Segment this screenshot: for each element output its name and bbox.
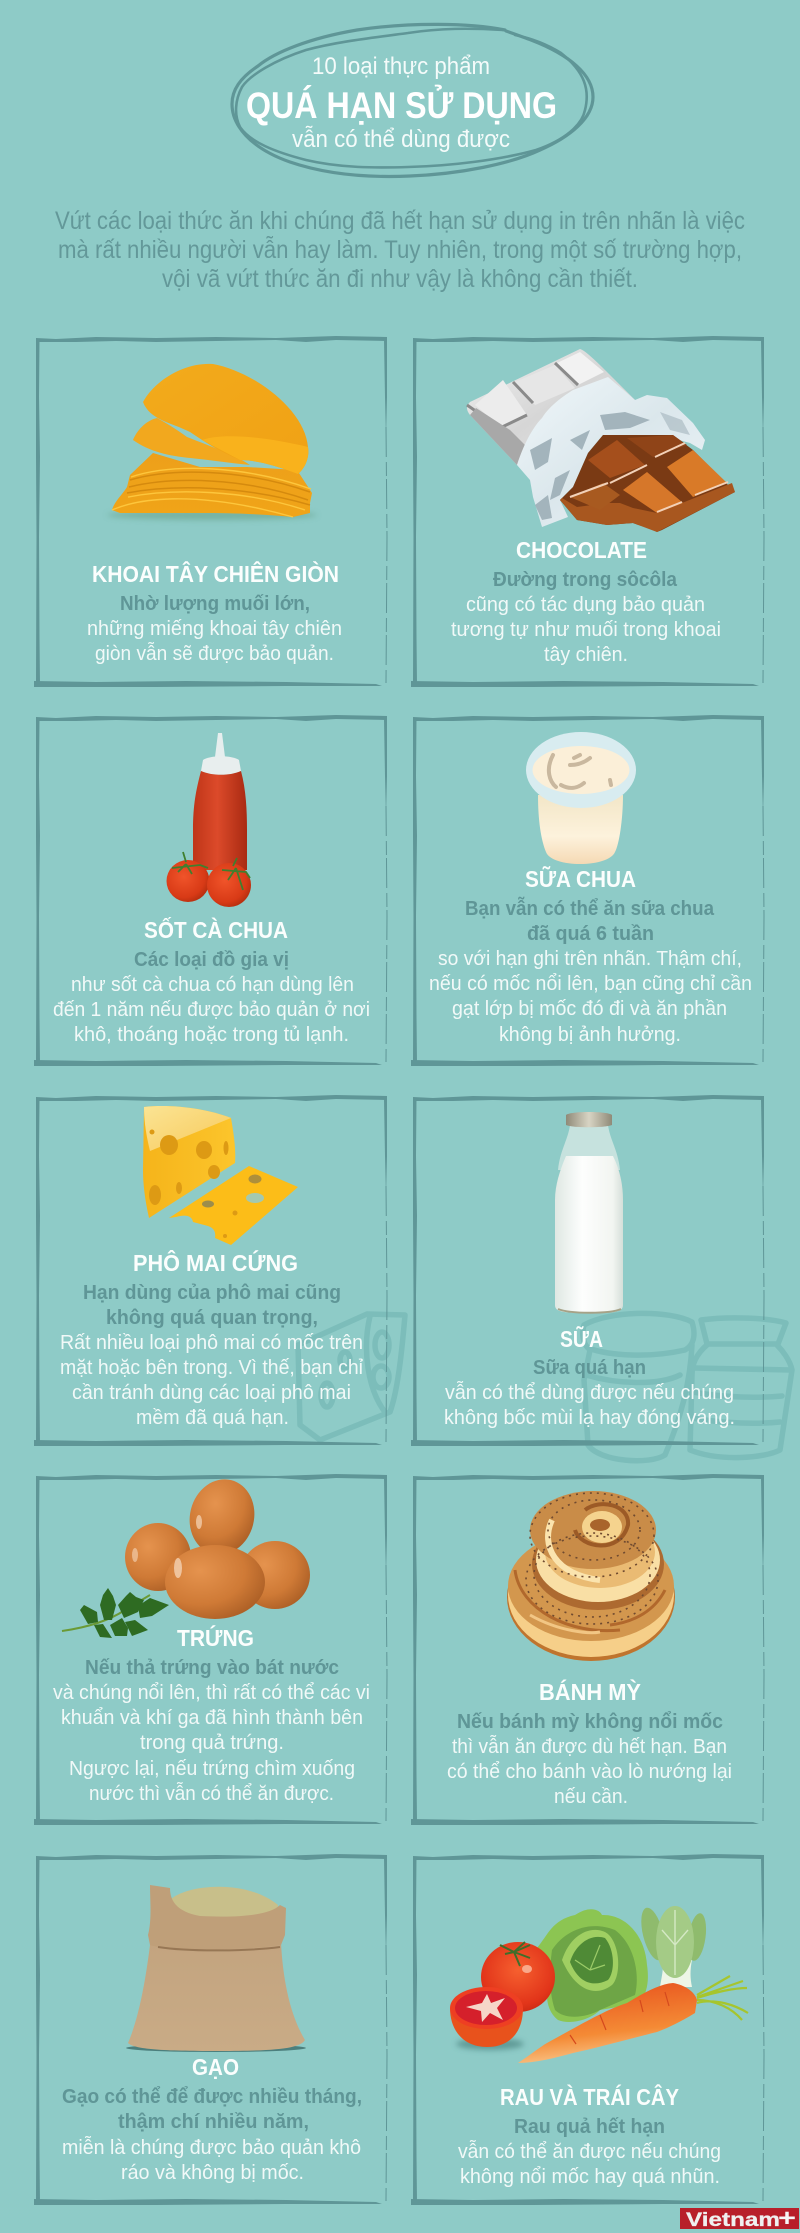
body text: tây chiên. bbox=[544, 643, 628, 666]
frame bbox=[411, 1854, 764, 2205]
body text: không bốc mùi lạ hay đóng váng. bbox=[444, 1406, 735, 1429]
frame bbox=[34, 1095, 387, 1446]
frame bbox=[34, 1854, 387, 2205]
body text bbox=[53, 973, 370, 1046]
body text: có thể cho bánh vào lò nướng lại bbox=[447, 1760, 732, 1783]
body text: trong quả trứng. bbox=[140, 1731, 284, 1754]
heading: GẠO bbox=[192, 2054, 239, 2080]
icon: rice sack bbox=[126, 1885, 306, 2052]
panel: sữa chua bbox=[411, 715, 764, 1066]
lead text: Đường trong sôcôla bbox=[493, 568, 678, 591]
lead text: Nếu thả trứng vào bát nước bbox=[85, 1656, 339, 1679]
frame bbox=[411, 336, 764, 687]
heading: RAU VÀ TRÁI CÂY bbox=[500, 2083, 679, 2110]
title line 2: QUÁ HẠN SỬ DỤNG bbox=[246, 84, 557, 126]
lead text: Hạn dùng của phô mai cũng bbox=[83, 1281, 341, 1304]
frame bbox=[34, 715, 387, 1066]
heading: SỮA CHUA bbox=[525, 865, 636, 892]
title badge bbox=[232, 24, 593, 176]
body text: cũng có tác dụng bảo quản bbox=[466, 593, 705, 616]
frame bbox=[411, 1095, 764, 1446]
body text bbox=[447, 1735, 732, 1808]
frame bbox=[411, 1474, 764, 1825]
intro paragraph bbox=[55, 207, 745, 293]
body text: khuẩn và khí ga đã hình thành bên bbox=[61, 1706, 363, 1729]
icon: eggs and parsley bbox=[62, 1472, 310, 1638]
body text: gạt lớp bị mốc đó đi và ăn phần bbox=[452, 997, 727, 1020]
lead text: không quá quan trọng, bbox=[106, 1306, 318, 1329]
intro paragraph: vội vã vứt thức ăn đi như vậy là không cần thiết. bbox=[162, 265, 638, 293]
body text: nếu cần. bbox=[554, 1785, 628, 1808]
lead text bbox=[62, 2085, 362, 2133]
heading: SỐT CÀ CHUA bbox=[144, 916, 288, 943]
logo: Vietnam+ bbox=[680, 2205, 799, 2232]
icon: chocolate bar in foil bbox=[467, 349, 735, 532]
icon: milk bottle bbox=[555, 1112, 623, 1313]
body text: đến 1 năm nếu được bảo quản ở nơi bbox=[53, 998, 370, 1021]
body text bbox=[53, 1681, 370, 1805]
body text: không bị ảnh hưởng. bbox=[499, 1023, 681, 1046]
body text: không nổi mốc hay quá nhũn. bbox=[460, 2165, 720, 2188]
panel: sốt cà chua bbox=[34, 715, 387, 1066]
logo: Vietnam+: + bbox=[778, 2205, 796, 2232]
panel: sữa bbox=[411, 1095, 764, 1446]
panel: chocolate bbox=[411, 336, 764, 687]
panel: bánh mỳ bbox=[411, 1474, 764, 1825]
body text bbox=[444, 1381, 735, 1429]
icon: yogurt cup bbox=[526, 732, 636, 864]
lead text bbox=[465, 896, 715, 945]
background doodle: milk glass and bottle bbox=[583, 1313, 792, 1461]
body text: giòn vẫn sẽ được bảo quản. bbox=[95, 642, 334, 665]
heading: KHOAI TÂY CHIÊN GIÒN bbox=[92, 560, 339, 587]
title line 1: 10 loại thực phẩm bbox=[312, 53, 490, 80]
icon: ketchup bottle and tomatoes bbox=[166, 733, 251, 907]
title line 3: vẫn có thể dùng được bbox=[292, 126, 510, 153]
panel: rau và trái cây bbox=[411, 1854, 764, 2205]
lead text: Sữa quá hạn bbox=[533, 1356, 646, 1379]
icon: bread roll bbox=[507, 1491, 675, 1661]
background doodle: cheese outline bbox=[298, 1314, 405, 1440]
body text: khô, thoáng hoặc trong tủ lạnh. bbox=[74, 1023, 349, 1046]
body text: vẫn có thể dùng được nếu chúng bbox=[445, 1381, 734, 1404]
lead text: Bạn vẫn có thể ăn sữa chua bbox=[465, 896, 715, 920]
lead text: thậm chí nhiều năm, bbox=[118, 2110, 309, 2133]
body text bbox=[62, 2136, 361, 2184]
icon: vegetables bbox=[450, 1905, 748, 2063]
body text bbox=[458, 2140, 721, 2188]
lead text: Các loại đồ gia vị bbox=[134, 948, 289, 971]
body text bbox=[429, 947, 752, 1046]
lead text bbox=[83, 1281, 341, 1329]
body text: mặt hoặc bên trong. Vì thế, bạn chỉ bbox=[60, 1356, 363, 1379]
body text: thì vẫn ăn được dù hết hạn. Bạn bbox=[452, 1735, 727, 1758]
body text: so với hạn ghi trên nhãn. Thậm chí, bbox=[438, 947, 742, 970]
body text: và chúng nổi lên, thì rất có thể các vi bbox=[53, 1681, 370, 1704]
icon: stacked potato chips bbox=[107, 364, 317, 520]
body text: vẫn có thể ăn được nếu chúng bbox=[458, 2140, 721, 2163]
hand drawn ellipse bbox=[232, 24, 593, 176]
heading: TRỨNG bbox=[177, 1624, 254, 1651]
lead text: Gạo có thể để được nhiều tháng, bbox=[62, 2085, 362, 2108]
panel: trứng bbox=[34, 1472, 387, 1825]
heading: SỮA bbox=[560, 1325, 603, 1352]
body text: cần tránh dùng các loại phô mai bbox=[72, 1381, 351, 1404]
logo: Vietnam+: Vietnam bbox=[686, 2210, 780, 2231]
body text bbox=[451, 593, 721, 666]
frame bbox=[411, 715, 764, 1066]
icon: cheese bbox=[143, 1106, 298, 1245]
lead text: đã quá 6 tuần bbox=[527, 922, 654, 945]
body text: ráo và không bị mốc. bbox=[121, 2161, 304, 2184]
body text: Ngược lại, nếu trứng chìm xuống bbox=[69, 1757, 355, 1780]
heading: BÁNH MỲ bbox=[539, 1678, 641, 1705]
heading: CHOCOLATE bbox=[516, 537, 647, 563]
frame bbox=[34, 1474, 387, 1825]
panel: khoai tây chiên giòn bbox=[34, 336, 387, 687]
body text: Rất nhiều loại phô mai có mốc trên bbox=[60, 1331, 363, 1354]
panel: phô mai cứng bbox=[34, 1095, 387, 1446]
body text bbox=[87, 617, 342, 665]
frame bbox=[34, 336, 387, 687]
body text: nếu có mốc nổi lên, bạn cũng chỉ cần bbox=[429, 972, 752, 995]
body text bbox=[60, 1331, 363, 1429]
body text: miễn là chúng được bảo quản khô bbox=[62, 2136, 361, 2159]
lead text: Rau quả hết hạn bbox=[514, 2115, 665, 2138]
body text: những miếng khoai tây chiên bbox=[87, 617, 342, 640]
panel: gạo bbox=[34, 1854, 387, 2205]
body text: như sốt cà chua có hạn dùng lên bbox=[71, 973, 354, 996]
body text: mềm đã quá hạn. bbox=[136, 1406, 289, 1429]
lead text: Nếu bánh mỳ không nổi mốc bbox=[457, 1710, 723, 1733]
heading: PHÔ MAI CỨNG bbox=[133, 1249, 298, 1276]
body text: nước thì vẫn có thể ăn được. bbox=[89, 1782, 334, 1805]
lead text: Nhờ lượng muối lớn, bbox=[120, 592, 310, 615]
body text: tương tự như muối trong khoai bbox=[451, 618, 721, 641]
